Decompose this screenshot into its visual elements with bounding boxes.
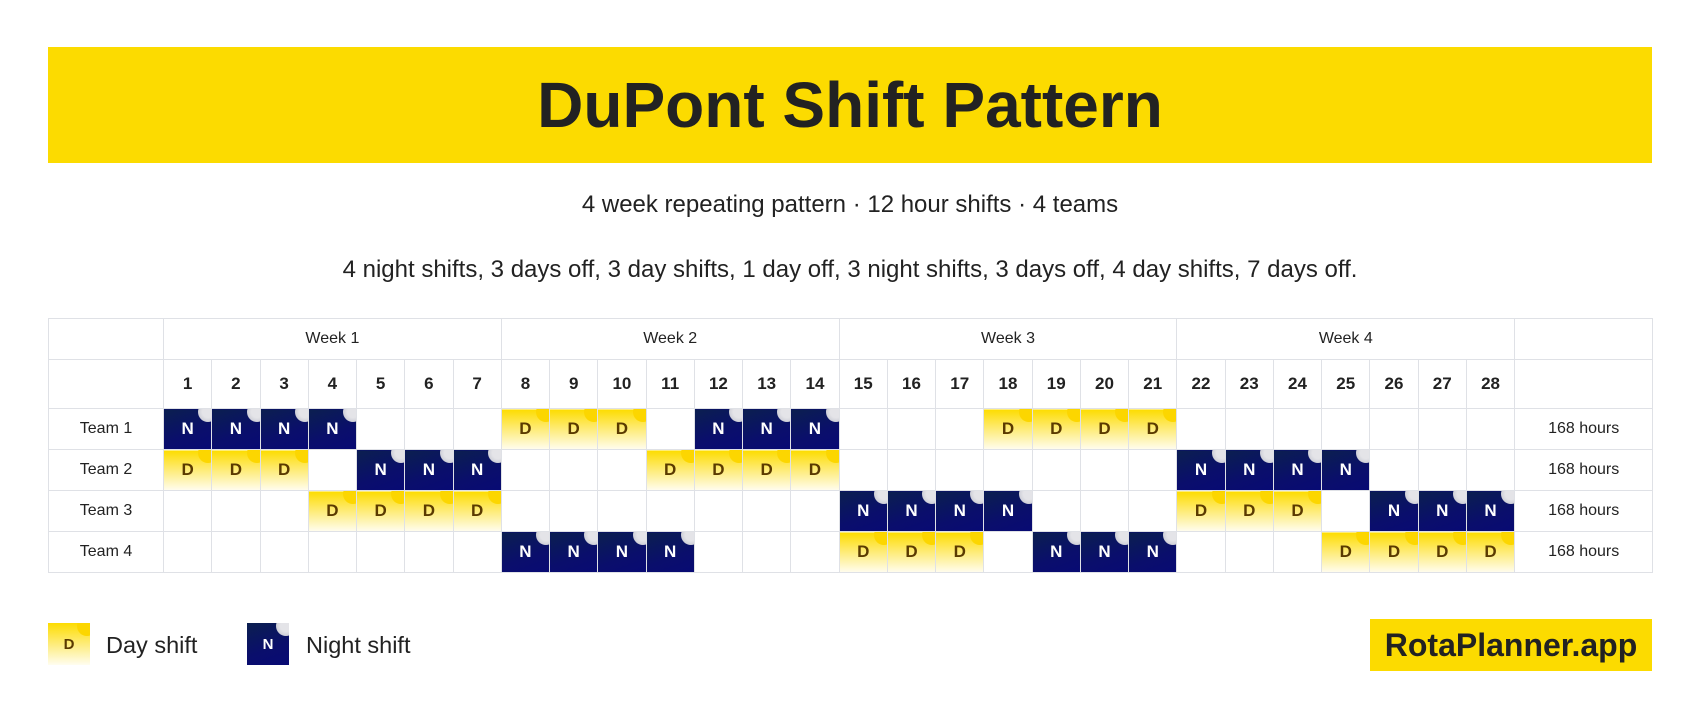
- rota table: 13: [757, 374, 776, 393]
- rota table: N: [1436, 501, 1448, 520]
- rota table: 25: [1336, 374, 1355, 393]
- rota table: D: [809, 460, 821, 479]
- rota table: D: [761, 460, 773, 479]
- rota table: Week 4: [1319, 330, 1373, 347]
- rota table: D: [181, 460, 194, 479]
- rota table: 12: [709, 374, 728, 393]
- rota table: D: [1388, 542, 1400, 561]
- rota table: 7: [472, 374, 482, 393]
- rota table: N: [857, 501, 869, 520]
- rota table: Team 3: [80, 502, 132, 519]
- title: [48, 47, 1652, 163]
- rota table: 15: [854, 374, 873, 393]
- rota table: D: [519, 419, 532, 438]
- rota table: D: [423, 501, 435, 520]
- rota table: N: [1195, 460, 1207, 479]
- rota table: D: [568, 419, 580, 438]
- rota table: 18: [998, 374, 1017, 393]
- rota table: D: [1050, 419, 1062, 438]
- rota table: N: [664, 542, 676, 561]
- rota table: N: [1340, 460, 1352, 479]
- rota table: D: [954, 542, 966, 561]
- rota table: 4: [328, 374, 337, 393]
- legend: night shift label: Night shift: [306, 632, 410, 658]
- rota table: N: [616, 542, 628, 561]
- rota table: 8: [521, 374, 530, 393]
- rota table: N: [1243, 460, 1255, 479]
- rota table: Week 3: [981, 330, 1035, 347]
- rota table: Week 1: [305, 330, 359, 347]
- rota table: Team 1: [80, 420, 132, 437]
- rota table: [48, 318, 1653, 573]
- rota table: 21: [1143, 374, 1162, 393]
- rota table: 3: [279, 374, 289, 393]
- rota table: N: [1098, 542, 1111, 561]
- rota table: N: [519, 542, 532, 561]
- rota table: Team 2: [80, 461, 132, 478]
- rota table: 10: [612, 374, 631, 393]
- rota table: 27: [1433, 374, 1452, 393]
- legend: night shift icon: [247, 623, 289, 665]
- rota table: D: [230, 460, 242, 479]
- rota table: N: [278, 419, 290, 438]
- rota table: N: [230, 419, 242, 438]
- rota table: 24: [1288, 374, 1307, 393]
- rota table: N: [954, 501, 966, 520]
- rota table: D: [1340, 542, 1352, 561]
- rota table: 28: [1481, 374, 1500, 393]
- rota table: D: [1002, 419, 1014, 438]
- rota table: N: [568, 542, 580, 561]
- rota table: N: [471, 460, 483, 479]
- rota table: 168 hours: [1548, 420, 1619, 437]
- rota table: 14: [805, 374, 824, 393]
- rota table: Week 2: [643, 330, 697, 347]
- rota table: 19: [1047, 374, 1066, 393]
- rota table: 26: [1385, 374, 1403, 393]
- rota table: 1: [183, 374, 192, 393]
- subtitle: 4 week repeating pattern · 12 hour shifts · 4 teams: [582, 191, 1118, 218]
- rota table: 168 hours: [1548, 461, 1619, 478]
- rota table: D: [1098, 419, 1111, 438]
- rota table: N: [905, 501, 918, 520]
- rota table: D: [374, 501, 387, 520]
- pattern description: 4 night shifts, 3 days off, 3 day shifts, 1 day off, 3 night shifts, 3 days off, 4 day shifts, 7 days off.: [343, 256, 1357, 283]
- rota table: N: [1002, 501, 1014, 520]
- rota table: 9: [569, 374, 578, 393]
- title: DuPont Shift Pattern: [537, 69, 1163, 141]
- rota table: N: [1388, 501, 1400, 520]
- rota table: 20: [1095, 374, 1114, 393]
- rota table: D: [857, 542, 869, 561]
- rota table: D: [616, 419, 628, 438]
- rota table: 17: [950, 374, 969, 393]
- rota table: D: [1436, 542, 1448, 561]
- rota table: D: [278, 460, 290, 479]
- rota table: D: [471, 501, 483, 520]
- rota table: N: [1050, 542, 1062, 561]
- legend: day shift icon: [48, 623, 90, 665]
- legend: day shift label: Day shift: [106, 632, 197, 658]
- rota table: 168 hours: [1548, 543, 1619, 560]
- rota table: Team 4: [80, 543, 132, 560]
- rota table: N: [326, 419, 339, 438]
- rota table: D: [905, 542, 918, 561]
- rota table: N: [1291, 460, 1304, 479]
- rota table: N: [712, 419, 725, 438]
- rota table: N: [423, 460, 435, 479]
- rota table: N: [761, 419, 773, 438]
- rota table: 2: [231, 374, 241, 393]
- brand badge: RotaPlanner.app: [1385, 626, 1637, 662]
- rota table: D: [1243, 501, 1255, 520]
- rota table: D: [1147, 419, 1159, 438]
- legend: day shift icon: D: [64, 636, 74, 652]
- brand badge: [1370, 619, 1652, 671]
- rota table: D: [326, 501, 339, 520]
- rota table: N: [1147, 542, 1159, 561]
- rota table: 22: [1192, 374, 1210, 393]
- rota table: D: [664, 460, 676, 479]
- legend: night shift icon: N: [263, 636, 273, 652]
- rota table: N: [809, 419, 821, 438]
- rota table: 11: [661, 374, 679, 393]
- rota table: D: [1484, 542, 1497, 561]
- rota table: N: [1484, 501, 1497, 520]
- rota table: 6: [424, 374, 434, 393]
- rota table: 168 hours: [1548, 502, 1619, 519]
- rota table: D: [712, 460, 725, 479]
- rota table: 16: [902, 374, 921, 393]
- rota table: N: [374, 460, 387, 479]
- rota table: 23: [1240, 374, 1259, 393]
- rota table: 5: [376, 374, 385, 393]
- rota table: D: [1195, 501, 1207, 520]
- rota table: D: [1291, 501, 1304, 520]
- rota table: N: [181, 419, 194, 438]
